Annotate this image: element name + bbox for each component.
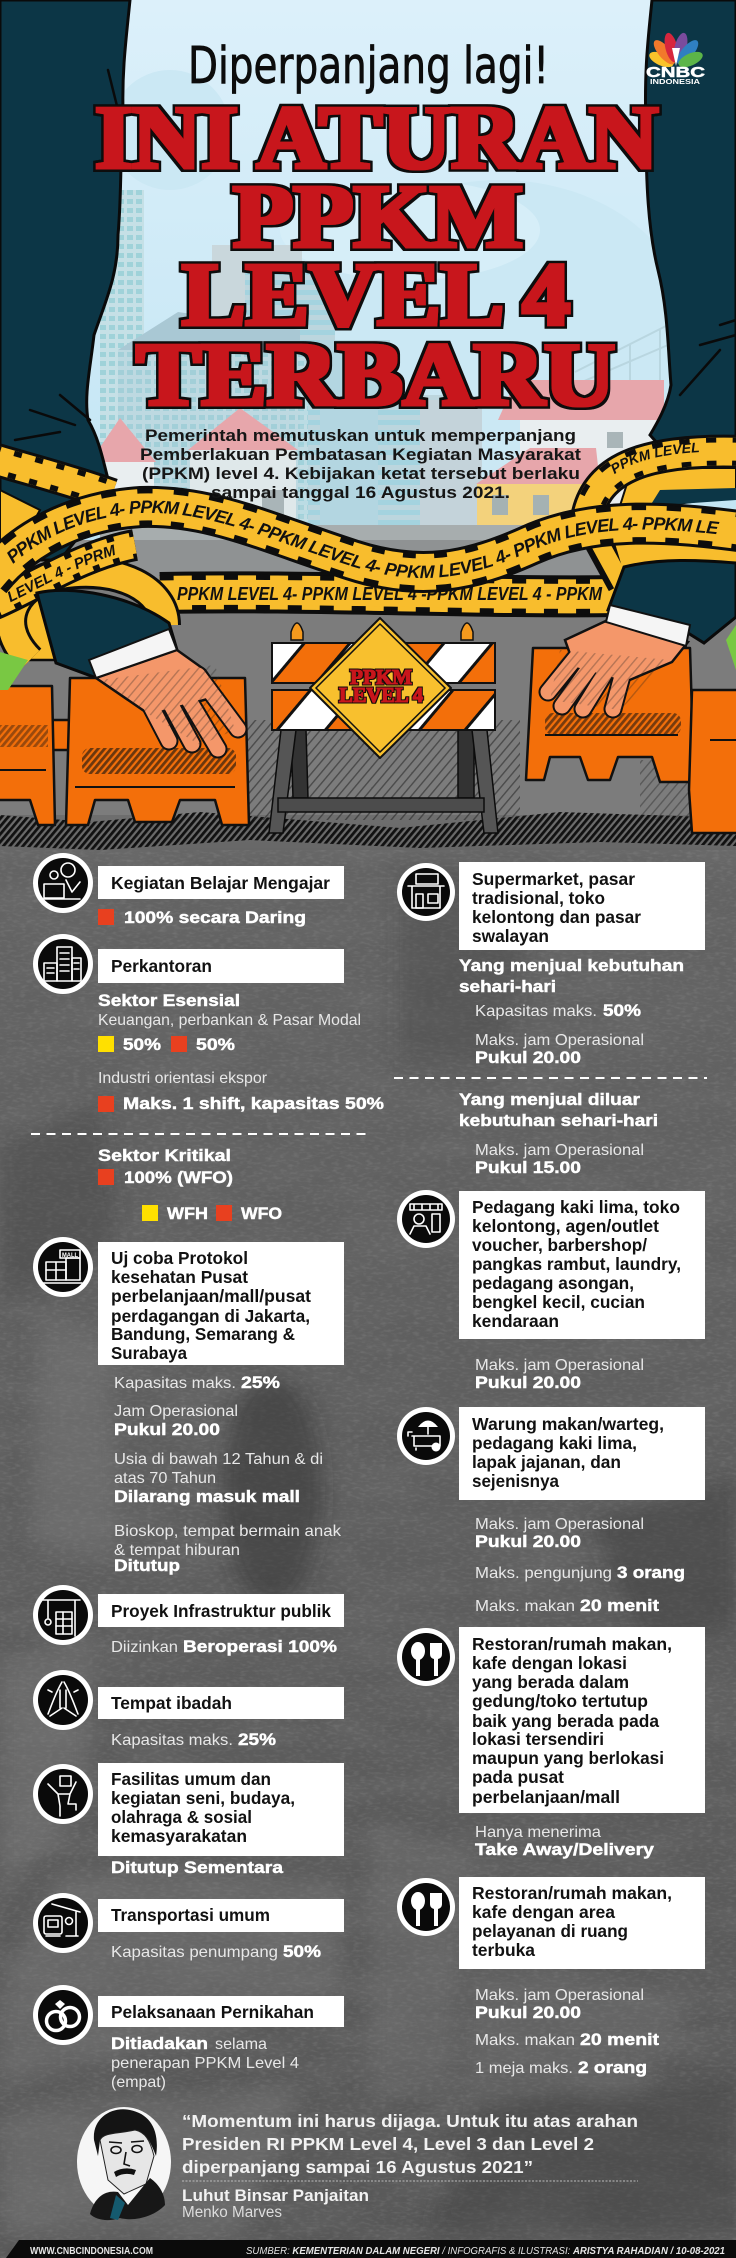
left hand (96, 650, 238, 749)
main title: PPKM (233, 166, 523, 267)
suit creases (15, 70, 736, 440)
icon: online learning (33, 853, 93, 913)
panel: warung makan: Maks. jam Operasional (475, 1516, 644, 1533)
panel: pelaksanaan pernikahan: Pelaksanaan Pernikahan (111, 2002, 314, 2022)
barrier striped boards (272, 643, 495, 683)
panel: fasilitas umum: kemasyarakatan (111, 1826, 247, 1846)
panel: transportasi umum: Transportasi umum (111, 1905, 270, 1925)
quote source (182, 2187, 369, 2221)
panel: restoran dalam gedung: Hanya menerima (475, 1824, 601, 1841)
panel: restoran ruang terbuka (397, 1877, 705, 2077)
tape: main wave: PPKM LEVEL 4- PPKM LEVEL 4- PPKM LEVEL 4- PPKM LEVEL 4- PPKM LEVEL 4- PPKM LE (7, 500, 720, 578)
intro text: Pemerintah memutuskan untuk memperpanjang (145, 427, 576, 445)
panel: proyek infrastruktur: Diizinkan (111, 1639, 178, 1656)
panel: uji coba mall: atas 70 Tahun (114, 1470, 216, 1487)
quote portrait (77, 2107, 171, 2220)
quote source: Luhut Binsar Panjaitan (182, 2187, 369, 2205)
tape: upper right loops: PPKM LEVEL (611, 442, 699, 474)
clouds (110, 70, 690, 480)
icon: store (397, 863, 455, 921)
panel: fasilitas umum: Fasilitas umum dan (111, 1769, 271, 1789)
icon: public activities (33, 1764, 93, 1824)
panel: uji coba mall: perdagangan di Jakarta, (111, 1306, 310, 1326)
icon: mall: MALL (62, 1253, 78, 1259)
panel: supermarket: Pukul 20.00 (475, 1049, 581, 1067)
footer: SUMBER: KEMENTERIAN DALAM NEGERI / INFOGRAFIS & ILUSTRASI: ARISTYA RAHADIAN / 10-08-2021 (246, 2245, 725, 2257)
panel: pedagang kaki lima: kelontong, agen/outlet (472, 1216, 659, 1236)
tape: lower straight: PPKM LEVEL 4- PPKM LEVEL 4 -PPKM LEVEL 4 - PPKM (177, 584, 603, 604)
panel: restoran dalam gedung: kafe dengan lokasi (472, 1653, 627, 1673)
panel: supermarket: kelontong dan pasar (472, 907, 641, 927)
barrier shading (0, 713, 736, 787)
icon: mall (33, 1237, 93, 1297)
icon: praying hands (33, 1670, 93, 1730)
panel: restoran dalam gedung: gedung/toko tertutup (472, 1691, 648, 1711)
panel: warung makan: Warung makan/warteg, (472, 1414, 664, 1434)
panel: pedagang kaki lima: bengkel kecil, cucian (472, 1292, 645, 1312)
panel: uji coba mall (33, 1237, 344, 1575)
tape: lower left loops: LEVEL 4 - PPRM (8, 544, 115, 602)
panel: transportasi umum (33, 1893, 344, 1961)
footer (6, 2240, 736, 2258)
panel: warung makan: lapak jajanan, dan (472, 1452, 621, 1472)
panel: uji coba mall: 25% (241, 1374, 280, 1392)
panel: kegiatan belajar mengajar: 100% secara Daring (124, 909, 306, 927)
panel: perkantoran (31, 934, 384, 1187)
panel: uji coba mall: Bioskop, tempat bermain anak (114, 1523, 342, 1540)
panel: perkantoran: 50% (123, 1036, 161, 1054)
panel: pedagang kaki lima: pedagang asongan, (472, 1273, 634, 1293)
panel: perkantoran: Sektor Esensial (98, 992, 240, 1010)
panel: perkantoran: 100% (WFO) (124, 1169, 233, 1187)
intro text (140, 427, 582, 502)
panel: uji coba mall: Bandung, Semarang & (111, 1324, 295, 1344)
logo: CNBC Indonesia: INDONESIA (650, 77, 701, 86)
lower textured background (0, 780, 736, 2258)
panel: restoran dalam gedung: baik yang berada pada (472, 1711, 659, 1731)
right sleeve (608, 560, 736, 643)
panel: restoran dalam gedung: Take Away/Delivery (475, 1841, 655, 1859)
panel: supermarket: Yang menjual kebutuhan (459, 957, 684, 975)
right hand (548, 620, 688, 710)
panel: warung makan: 3 orang (617, 1564, 685, 1582)
panel: perkantoran: Industri orientasi ekspor (98, 1070, 268, 1087)
panel: uji coba mall: Dilarang masuk mall (114, 1488, 300, 1506)
panel: restoran dalam gedung (397, 1627, 705, 1859)
panel: restoran ruang terbuka: kafe dengan area (472, 1902, 615, 1922)
panel: uji coba mall: Pukul 20.00 (114, 1421, 220, 1439)
tape: upper left band (0, 458, 112, 570)
panel: proyek infrastruktur: Proyek Infrastruktur publik (111, 1601, 331, 1621)
panel: perkantoran: Perkantoran (111, 956, 212, 976)
panel: proyek infrastruktur: Beroperasi 100% (183, 1638, 337, 1656)
panel: pedagang kaki lima: kendaraan (472, 1311, 559, 1331)
barrier lamps (291, 623, 473, 640)
panel: supermarket: kebutuhan sehari-hari (459, 1112, 658, 1130)
panel: uji coba mall: Surabaya (111, 1343, 187, 1363)
panel: pedagang kaki lima (397, 1190, 705, 1392)
sky (0, 0, 736, 540)
panel: uji coba mall: & tempat hiburan (114, 1542, 240, 1559)
quote text: diperpanjang sampai 16 Agustus 2021” (182, 2157, 533, 2177)
panel: supermarket (394, 862, 707, 1177)
panel: restoran ruang terbuka: 20 menit (580, 2031, 660, 2049)
panel: restoran ruang terbuka: Maks. makan (475, 2032, 575, 2049)
panel: supermarket: Supermarket, pasar (472, 869, 635, 889)
tape: lower left loops (0, 529, 181, 666)
panel: tempat ibadah (33, 1670, 344, 1749)
panel: restoran ruang terbuka: Maks. jam Operasional (475, 1987, 644, 2004)
right cuff (606, 605, 690, 646)
footer: WWW.CNBCINDONESIA.COM (30, 2245, 153, 2257)
panel: restoran dalam gedung: yang berada dalam (472, 1672, 629, 1692)
panel: uji coba mall: Ditutup (114, 1557, 180, 1575)
icon: wedding rings (33, 1985, 93, 2045)
panel: fasilitas umum: Ditutup Sementara (111, 1859, 284, 1877)
green bits (0, 625, 736, 690)
road barrier sign (269, 618, 498, 833)
icon: construction (33, 1585, 93, 1645)
road barrier sign: LEVEL 4 (339, 683, 423, 707)
panel: fasilitas umum: kegiatan seni, budaya, (111, 1788, 295, 1808)
panel: supermarket: sehari-hari (459, 978, 556, 996)
panel: perkantoran: Sektor Kritikal (98, 1147, 231, 1165)
panel: proyek infrastruktur (33, 1585, 344, 1656)
panel: pedagang kaki lima: Maks. jam Operasional (475, 1357, 644, 1374)
panel: perkantoran: Keuangan, perbankan & Pasar Modal (98, 1012, 361, 1029)
panel: supermarket: Maks. jam Operasional (475, 1032, 644, 1049)
panel: restoran dalam gedung: Restoran/rumah makan, (472, 1634, 672, 1654)
panel: supermarket: swalayan (472, 926, 549, 946)
legend (142, 1205, 282, 1223)
quote source: Menko Marves (182, 2204, 282, 2221)
intro text: (PPKM) level 4. Kebijakan ketat tersebut berlaku (142, 465, 580, 483)
hero illustration (0, 0, 736, 850)
panel: restoran dalam gedung: lokasi tersendiri (472, 1729, 604, 1749)
icon: street vendor (397, 1190, 455, 1248)
orange water barriers (0, 648, 736, 833)
road (0, 590, 736, 815)
panel: warung makan: 20 menit (580, 1597, 660, 1615)
quote text (182, 2111, 638, 2177)
icon: bus stop (33, 1893, 93, 1953)
barrier legs (269, 730, 498, 833)
panel: kegiatan belajar mengajar: Kegiatan Belajar Mengajar (111, 873, 330, 893)
left cuff (89, 629, 177, 678)
panel: restoran ruang terbuka: 2 orang (578, 2059, 647, 2077)
panel: fasilitas umum (33, 1763, 344, 1877)
panel: supermarket: 50% (603, 1002, 641, 1020)
left sleeve (37, 590, 177, 677)
panel: pelaksanaan pernikahan: selama (215, 2036, 267, 2053)
panel: uji coba mall: Kapasitas maks. (114, 1375, 236, 1392)
panel: warung makan: sejenisnya (472, 1471, 559, 1491)
panel: warung makan: pedagang kaki lima, (472, 1433, 637, 1453)
panel: restoran dalam gedung: pada pusat (472, 1767, 564, 1787)
icon: food cart (397, 1407, 455, 1465)
panel: warung makan: Maks. makan (475, 1598, 575, 1615)
panel: pedagang kaki lima: Pedagang kaki lima, toko (472, 1197, 680, 1217)
legend: WFH (167, 1205, 208, 1223)
panel: tempat ibadah: Kapasitas maks. (111, 1732, 233, 1749)
panel: warung makan: Maks. pengunjung (475, 1565, 612, 1582)
logo: CNBC Indonesia: CNBC (646, 64, 705, 81)
panel: restoran ruang terbuka: pelayanan di ruang (472, 1921, 628, 1941)
panel: restoran dalam gedung: maupun yang berlokasi (472, 1748, 664, 1768)
panel: transportasi umum: Kapasitas penumpang (111, 1944, 278, 1961)
small heading: Diperpanjang lagi! (188, 37, 549, 96)
ground hatch shadow (0, 812, 736, 850)
panel: supermarket: Kapasitas maks. (475, 1003, 597, 1020)
icon: office buildings (33, 934, 93, 994)
panel: uji coba mall: Usia di bawah 12 Tahun & di (114, 1451, 323, 1468)
panel: pedagang kaki lima: Pukul 20.00 (475, 1374, 581, 1392)
panel: tempat ibadah: Tempat ibadah (111, 1693, 232, 1713)
intro text: Pemberlakuan Pembatasan Kegiatan Masyarakat (140, 446, 582, 464)
panel: pelaksanaan pernikahan: Ditiadakan (111, 2035, 208, 2053)
panel: supermarket: tradisional, toko (472, 888, 605, 908)
city buildings (0, 190, 736, 580)
main title: INI ATURAN (95, 87, 658, 188)
panel: restoran ruang terbuka: terbuka (472, 1940, 535, 1960)
panel: uji coba mall: perbelanjaan/mall/pusat (111, 1286, 311, 1306)
panel: pelaksanaan pernikahan: penerapan PPKM Level 4 (111, 2055, 299, 2072)
panel: warung makan (397, 1407, 705, 1615)
suit: right torso (645, 0, 736, 480)
panel: supermarket: Pukul 15.00 (475, 1159, 581, 1177)
panel: uji coba mall: kesehatan Pusat (111, 1267, 248, 1287)
panel: restoran ruang terbuka: Restoran/rumah makan, (472, 1883, 672, 1903)
sign text: PPKM (350, 665, 412, 689)
logo: CNBC Indonesia (646, 32, 705, 86)
quote text: Presiden RI PPKM Level 4, Level 3 dan Level 2 (182, 2134, 594, 2154)
panel: perkantoran: 50% (196, 1036, 235, 1054)
panel: tempat ibadah: 25% (238, 1731, 276, 1749)
panel: uji coba mall: Jam Operasional (114, 1403, 238, 1420)
panel: restoran ruang terbuka: Pukul 20.00 (475, 2004, 581, 2022)
legend: WFO (241, 1205, 282, 1223)
panel: restoran dalam gedung: perbelanjaan/mall (472, 1787, 620, 1807)
panel: perkantoran: Maks. 1 shift, kapasitas 50% (123, 1095, 384, 1113)
intro text: sampai tanggal 16 Agustus 2021. (211, 484, 510, 502)
panel: supermarket: Yang menjual diluar (459, 1091, 641, 1109)
panel: pelaksanaan pernikahan: (empat) (111, 2074, 166, 2091)
main title: TERBARU (136, 324, 615, 425)
panel: pelaksanaan pernikahan (33, 1985, 344, 2091)
panel: fasilitas umum: olahraga & sosial (111, 1807, 252, 1827)
diamond sign (310, 618, 451, 758)
icon: spoon and fork (397, 1878, 455, 1936)
main title: LEVEL 4 (182, 244, 570, 345)
panel: restoran ruang terbuka: 1 meja maks. (475, 2060, 573, 2077)
main title (95, 87, 658, 425)
panel: pedagang kaki lima: voucher, barbershop/ (472, 1235, 647, 1255)
panel: transportasi umum: 50% (283, 1943, 321, 1961)
panel: supermarket: Maks. jam Operasional (475, 1142, 644, 1159)
panel: kegiatan belajar mengajar (33, 853, 344, 927)
suit: left torso (0, 0, 130, 560)
panel: pedagang kaki lima: pangkas rambut, laundry, (472, 1254, 681, 1274)
panel: uji coba mall: Uj coba Protokol (111, 1248, 248, 1268)
logo feathers (647, 32, 705, 70)
icon: spoon and fork (397, 1628, 455, 1686)
panel: warung makan: Pukul 20.00 (475, 1533, 581, 1551)
tape: upper right loops (572, 434, 736, 592)
quote text: “Momentum ini harus dijaga. Untuk itu atas arahan (182, 2111, 638, 2131)
